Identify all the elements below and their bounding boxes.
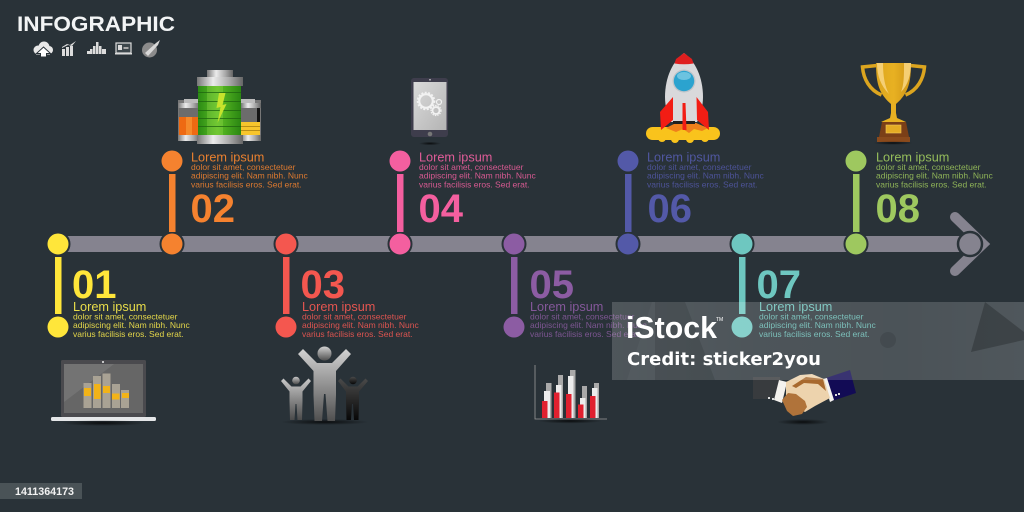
text 07: varius facilisis eros. Sed erat. [759,329,870,339]
number 04: 04 [418,187,464,231]
step 04 [388,150,536,256]
text 08: varius facilisis eros. Sed erat. [876,180,987,190]
icon: rising bars [62,41,76,56]
image id badge: 1411364173 [15,486,74,498]
step 01 [46,232,190,339]
gears [418,92,442,116]
node 08 [844,232,868,256]
icon: tablet with gears [411,78,448,145]
text 06: Lorem ipsum [647,150,720,164]
end dot 02 [162,150,182,172]
number 01: 01 [72,263,116,307]
number 06: 06 [648,187,692,231]
icon: three people [281,346,369,425]
text 03: adipiscing elit. Nam nibh. Nunc [302,320,419,330]
text 08: dolor sit amet, consectetuer [876,162,981,172]
text 02: dolor sit amet, consectetuer [191,162,296,172]
node 07 [730,232,754,256]
text 05: varius facilisis eros. Sed erat. [530,329,641,339]
stem 06 [625,174,632,232]
text 04: Lorem ipsum [419,150,492,164]
text 06 [647,150,764,190]
arrow head [955,217,983,271]
end dot 07 [732,316,752,338]
text 01: varius facilisis eros. Sed erat. [73,329,184,339]
text 07: dolor sit amet, consectetuer [759,312,864,322]
icon: bar chart [535,365,607,424]
step 02 [160,150,308,256]
text 01 [73,300,190,339]
title: INFOGRAPHIC [17,13,175,36]
stem 05 [511,257,518,314]
text 02: adipiscing elit. Nam nibh. Nunc [191,171,308,181]
step 03 [274,232,419,339]
icon: trophy [862,63,924,145]
right person [338,377,368,420]
number 03: 03 [300,263,345,307]
step 05 [502,232,647,339]
text 02 [191,150,308,190]
text 05: adipiscing elit. Nam nibh. Nunc [530,320,647,330]
end dot 03 [276,316,296,338]
center person [298,346,351,421]
text 04: dolor sit amet, consectetuer [419,162,524,172]
flame [646,127,720,143]
text 03 [302,300,419,339]
text 03: varius facilisis eros. Sed erat. [302,329,413,339]
stem 03 [283,257,290,314]
icon: rocket [646,53,720,143]
text 08: Lorem ipsum [876,150,949,164]
iStock logo: iStock [626,310,718,345]
trophy cup [876,63,911,116]
trophy handles [862,66,924,95]
number 07: 07 [756,263,801,307]
stem 08 [853,174,860,232]
left person [281,377,311,420]
number 08: 08 [876,187,920,231]
text 01: dolor sit amet, consectetuer [73,312,178,322]
icon: handshake [753,370,856,425]
node 04 [388,232,412,256]
end dot 06 [618,150,638,172]
icon: histogram [87,42,106,54]
nose cone [674,53,694,64]
fins [660,97,709,130]
step 06 [616,150,764,256]
end dot 05 [504,316,524,338]
end dot 08 [846,150,866,172]
node 02 [160,232,184,256]
text 04 [419,150,536,190]
icon: satellite dish [142,40,160,58]
text 08 [876,150,993,190]
credit line: Credit: sticker2you [627,350,821,370]
text 02: varius facilisis eros. Sed erat. [191,180,302,190]
number 02: 02 [190,187,235,231]
text 03: Lorem ipsum [302,300,375,314]
step 07 [730,232,876,339]
step 08 [844,150,993,256]
text 06: dolor sit amet, consectetuer [647,162,752,172]
watermark band [612,302,1024,380]
stem 07 [739,257,746,314]
icon: id monitor [115,43,132,54]
text 08: adipiscing elit. Nam nibh. Nunc [876,171,993,181]
trophy base [879,122,909,137]
icon: batteries [178,70,261,144]
stem 01 [55,257,62,314]
text 05: Lorem ipsum [530,300,603,314]
text 01: Lorem ipsum [73,300,146,314]
small orange battery [178,99,200,141]
text 03: dolor sit amet, consectetuer [302,312,407,322]
header icon row [34,40,160,58]
timeline bar [58,217,983,271]
text 07 [759,300,876,339]
text 05 [530,300,647,339]
text 07: Lorem ipsum [759,300,832,314]
text 06: varius facilisis eros. Sed erat. [647,180,758,190]
icon: cloud upload [34,42,53,57]
end dot 04 [390,150,410,172]
end dot 01 [48,316,68,338]
arrow end node [958,232,982,256]
trademark: TM [716,317,723,323]
node 05 [502,232,526,256]
number 05: 05 [530,263,574,307]
text 07: adipiscing elit. Nam nibh. Nunc [759,320,876,330]
rocket body [665,53,703,122]
large green battery [197,70,243,144]
text 02: Lorem ipsum [191,150,264,164]
node 03 [274,232,298,256]
watermark shapes [612,302,1024,380]
text 05: dolor sit amet, consectetuer [530,312,635,322]
node 06 [616,232,640,256]
stem 04 [397,174,404,232]
image id badge [0,483,82,499]
small yellow battery [241,99,261,141]
node 01 [46,232,70,256]
porthole [672,70,696,92]
text 04: adipiscing elit. Nam nibh. Nunc [419,171,536,181]
stem 02 [169,174,176,232]
text 06: adipiscing elit. Nam nibh. Nunc [647,171,764,181]
icon: laptop with chart [51,360,156,426]
text 04: varius facilisis eros. Sed erat. [419,180,530,190]
text 01: adipiscing elit. Nam nibh. Nunc [73,320,190,330]
